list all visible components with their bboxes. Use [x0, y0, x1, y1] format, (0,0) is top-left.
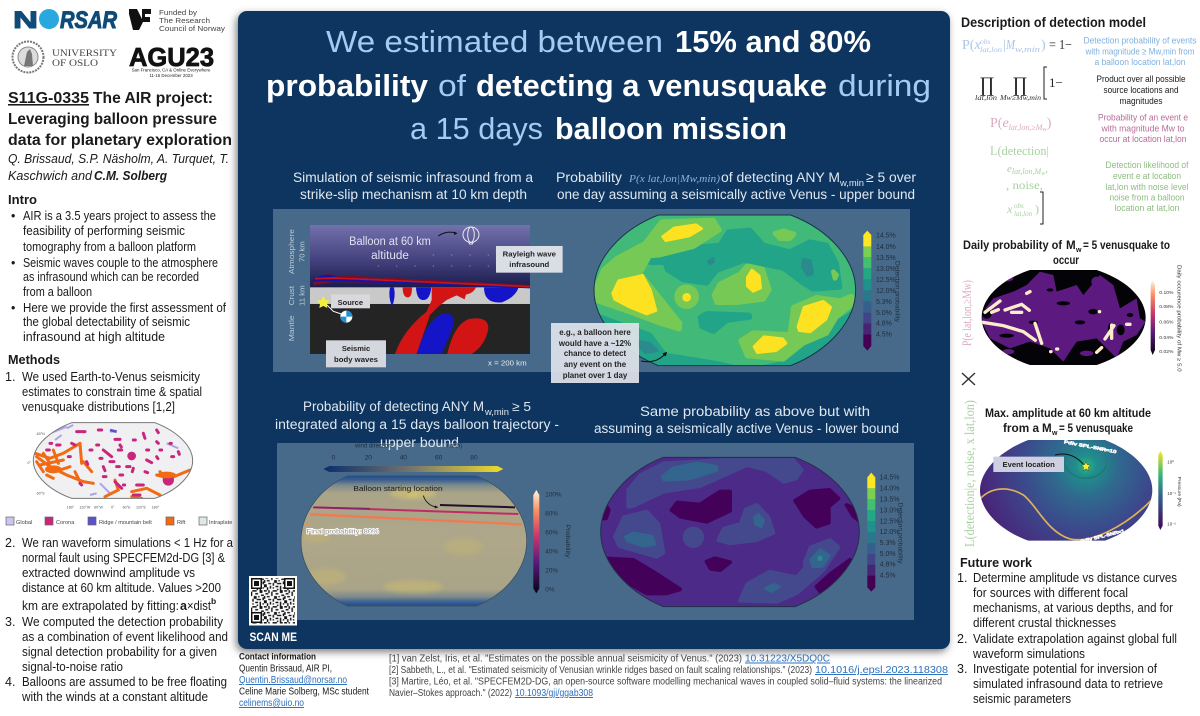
caption: daily detection probability: P(x lat,lon|Mw,min)	[628, 173, 720, 185]
map: balloon trajectory: Final probability: 80%	[307, 529, 379, 536]
caption: daily detection probability	[556, 170, 916, 203]
logo: University of Oslo: UNIVERSITY	[52, 49, 117, 59]
callout: balloon example: any event on the	[564, 360, 627, 369]
text block: Intro bullets: Here we provide the first assessment of	[23, 301, 226, 315]
chart: seismic infrasound simulation: Atmosphere	[287, 229, 296, 274]
heading: Intro: Intro	[8, 192, 37, 207]
annotation: event probability: occur at location lat,lon	[1100, 134, 1186, 145]
text block: future work list: waveform simulations	[972, 647, 1085, 661]
chart: seismic infrasound simulation: 70 km	[298, 241, 307, 262]
chart: seismic infrasound simulation: Balloon at 60 km	[349, 234, 431, 248]
caption: trajectory probability	[275, 399, 559, 433]
formula label: likelihood, rotated: L(detection|e, noise, x lat,lon)	[963, 400, 978, 547]
arrow: to balloon location	[641, 353, 666, 362]
colorbar: detection probability: 4.8%	[876, 321, 892, 328]
colorbar: occurrence probability: 0.10%	[1159, 290, 1174, 296]
text block: Methods item 1: We used Earth-to-Venus seismicity	[22, 370, 201, 384]
annotation: detection likelihood: noise from a balloon	[1110, 192, 1184, 204]
map: balloon trajectory: 0	[331, 455, 335, 462]
authors: Q. Brissaud, S.P. Näsholm, A. Turquet, T.	[8, 152, 229, 166]
logo: University of Oslo	[12, 42, 117, 72]
text block: Intro bullets: Seismic waves couple to the atmosphere	[23, 256, 218, 270]
callout: balloon example: e.g., a balloon here	[559, 328, 631, 337]
text block: Methods item 1: venusquake distributions [1,2]	[22, 400, 175, 414]
text block: Intro bullets: •	[11, 256, 15, 270]
colorbar: occurrence probability: 0.02%	[1159, 349, 1174, 355]
text block: future work list	[957, 571, 1177, 706]
formula: detection likelihood: w	[1041, 171, 1045, 177]
headline: a 15 days	[410, 111, 543, 146]
panel: main findings	[238, 11, 950, 649]
legend: distribution types: Intraplate	[209, 520, 232, 526]
authors: C.M. Solberg	[94, 169, 167, 183]
formula: detection likelihood: e	[1007, 163, 1012, 175]
text block: Intro bullets: AIR is a 3.5 years project to assess the	[23, 209, 216, 223]
colorbar: probability: 100%	[545, 491, 562, 498]
heading: Methods: Methods	[8, 352, 60, 367]
text block: Intro bullets: from a balloon	[23, 285, 92, 299]
colorbar: detection probability lower bound: 5.3%	[880, 540, 896, 547]
panel: top figures	[273, 209, 910, 372]
annotation: product: magnitudes	[1120, 96, 1163, 107]
colorbar: detection probability: 12.0%	[876, 288, 896, 295]
colorbar: detection probability: 5.0%	[876, 310, 892, 317]
heading: daily probability: M	[1066, 239, 1076, 252]
logo: AGU23: San Francisco, CA & Online Everywhere	[132, 68, 211, 72]
map: balloon trajectory: Balloon starting location	[353, 484, 443, 493]
colorbar: detection probability lower bound: 4.5%	[880, 573, 896, 580]
text block: Intro bullets: •	[11, 301, 15, 315]
annotation: detection probability	[1084, 36, 1197, 68]
map: balloon trajectory: north)	[447, 444, 462, 450]
references: [3] Martire, Léo, et al. "SPECFEM2D-DG, an open-source software modelling mechanical waves in coupled solid–fluid systems: the linearized	[389, 676, 942, 688]
text block: Methods items 2-4: with the winds at a constant altitude	[21, 690, 208, 704]
colorbar: probability: 0%	[545, 586, 555, 593]
colorbar: pressure: Pressure (Pa)	[1177, 477, 1182, 507]
text block: future work list: 1.	[957, 571, 967, 585]
caption: trajectory probability: Probability of detecting ANY M	[303, 399, 484, 415]
colorbar: detection probability: Detection probability	[893, 261, 900, 323]
formula: detection likelihood: ,	[1045, 163, 1048, 175]
formula: detection likelihood	[990, 143, 1049, 224]
logo: NORSAR: RSAR	[60, 7, 118, 34]
colorbar: detection probability: 14.0%	[876, 244, 896, 251]
poster title: Leveraging balloon pressure	[8, 111, 217, 128]
legend: distribution types	[6, 517, 232, 526]
formula: detection probability: P(x	[962, 38, 981, 53]
logo: AGU23: AGU23	[129, 42, 214, 72]
colorbar: detection probability lower bound: 12.5%	[880, 519, 899, 526]
formula: detection probability: |	[1003, 38, 1006, 53]
map: venusquake distribution: 120°E	[136, 506, 147, 510]
heading: future work: Future work	[960, 555, 1033, 570]
map: venusquake distribution: 60°E	[123, 506, 131, 510]
colorbar: detection probability lower bound: 13.5%	[880, 497, 899, 504]
formula: product over sources: Mw≥Mw,min	[999, 94, 1042, 102]
contact information: Quentin Brissaud, AIR PI,	[239, 664, 332, 674]
references: [2] Sabbeth, L., et al. "Estimated seismicity of Venusian wrinkle ridges based on fault scaling relationships." (2023)	[389, 665, 812, 676]
heading: max amplitude: from a	[1003, 422, 1040, 435]
chart: seismic infrasound simulation: body waves	[334, 355, 378, 364]
heading: daily probability: occur	[1053, 254, 1079, 267]
panel: bottom figures	[277, 443, 914, 620]
caption: simulation	[293, 170, 533, 203]
colorbar: probability: 80%	[545, 510, 558, 517]
chart: seismic infrasound simulation: x = 200 km	[488, 358, 527, 367]
caption: trajectory probability: w,min	[484, 407, 509, 417]
text block: Methods item 1: 1.	[5, 370, 15, 384]
formula: event probability: w	[1042, 127, 1047, 133]
annotation: detection likelihood: lat,lon with noise level	[1106, 182, 1188, 193]
references	[389, 654, 949, 699]
references: 10.1093/gji/ggab308	[515, 688, 593, 699]
text block: Methods items 2-4: normal fault using SPECFEM2d-DG [3] &	[22, 551, 226, 565]
formula: detection likelihood: , noise,	[1006, 178, 1043, 192]
logo: NORSAR	[13, 7, 118, 34]
callout: balloon example	[551, 323, 639, 383]
map: balloon trajectory: wind direction	[354, 444, 392, 450]
colorbar: pressure	[1158, 451, 1182, 530]
formula: detection likelihood: )	[1035, 202, 1039, 216]
text block: Methods items 2-4: signal detection probability for a given	[22, 645, 217, 659]
colorbar: detection probability: 4.5%	[876, 332, 892, 339]
poster title	[8, 90, 232, 149]
annotation: product: Product over all possible	[1096, 74, 1186, 85]
text block: future work list: seismic parameters	[973, 692, 1071, 706]
colorbar: detection probability: 12.5%	[876, 277, 896, 284]
text block: Intro bullets: tomography from a balloon platform	[23, 240, 196, 254]
map: balloon trajectory: 60	[435, 455, 443, 462]
text block: future work list: for sources with different focal	[973, 586, 1128, 600]
colorbar: occurrence probability: 0.08%	[1159, 304, 1174, 310]
text block: Methods items 2-4: We computed the detection probability	[22, 615, 224, 629]
heading: max amplitude: = 5 venusquake	[1059, 422, 1133, 435]
headline: We estimated between	[326, 24, 663, 59]
map: balloon trajectory	[301, 444, 571, 606]
logo: Research Council of Norway	[129, 8, 225, 33]
text block: Methods items 2-4: ×dist	[187, 599, 211, 613]
formula: product over sources: 1−	[1049, 75, 1063, 90]
text block: Methods items 2-4	[5, 536, 233, 704]
caption: trajectory probability: integrated along a 15 days balloon trajectory -	[275, 417, 559, 433]
contact information: celinems@uio.no	[239, 698, 304, 709]
map: venusquake distribution: 60°W	[94, 506, 104, 510]
colorbar: occurrence probability: Daily occurence probability of Mw ≥ 5.0	[1175, 265, 1181, 372]
annotation: product	[1096, 74, 1186, 107]
caption: daily detection probability: ≥ 5 over	[866, 170, 916, 186]
references: [1] van Zelst, Iris, et al. "Estimates on the possible annual seismicity of Venus." (2023)	[389, 654, 742, 664]
caption: lower bound: Same probability as above but with	[640, 404, 870, 420]
map: venusquake distribution: 60°S	[37, 491, 45, 495]
headline: detecting a venusquake	[476, 68, 827, 103]
chart: seismic infrasound simulation: altitude	[371, 248, 409, 262]
colorbar: detection probability lower bound	[867, 473, 904, 592]
formula: detection likelihood: lat,lon,M	[1012, 167, 1043, 176]
map: venusquake distribution: 0°	[27, 461, 31, 465]
logo: University of Oslo: OF OSLO	[52, 59, 98, 69]
heading: daily probability	[963, 239, 1170, 267]
text block: future work list: simulated infrasound data to retrieve	[973, 677, 1163, 691]
map: balloon trajectory: 80	[470, 455, 478, 462]
map: venusquake distribution: 180°	[67, 506, 75, 510]
headline: balloon mission	[555, 111, 787, 146]
colorbar: detection probability: 14.5%	[876, 233, 896, 240]
formula: detection probability: M	[1005, 38, 1016, 53]
QR code	[249, 576, 297, 626]
colorbar: probability: 20%	[545, 567, 558, 574]
formula: detection likelihood: obs	[1014, 202, 1024, 210]
formula: product over sources: lat,lon	[975, 94, 998, 102]
legend: distribution types: Rift	[177, 520, 186, 526]
text block: Methods items 2-4: b	[211, 596, 216, 606]
text block: Methods items 2-4: km are extrapolated by fitting:	[22, 599, 179, 613]
headline	[266, 24, 931, 146]
annotation: detection likelihood: event e at location	[1113, 171, 1181, 182]
text block: Methods items 2-4: We ran waveform simulations < 1 Hz for a	[22, 536, 233, 550]
chart: seismic infrasound simulation: Rayleigh wave	[503, 249, 556, 258]
map: venusquake distribution: 120°W	[79, 506, 91, 510]
text block: future work list: 3.	[957, 662, 967, 676]
text block: Methods items 2-4: distance at 60 km altitude. Values >200	[22, 581, 221, 595]
chart: seismic infrasound simulation: Mantle	[287, 315, 296, 341]
logo: Research Council of Norway: The Research	[159, 16, 210, 25]
colorbar: probability: Probability	[564, 524, 571, 559]
colorbar: detection probability lower bound: 14.5%	[880, 475, 899, 482]
formula: event probability: )	[1047, 116, 1052, 131]
authors	[8, 152, 229, 183]
chart: seismic infrasound simulation: infrasound	[509, 260, 550, 269]
text block: Methods item 1: estimates to constrain time & spatial	[22, 385, 202, 399]
map: maximum amplitude: Event location	[1002, 460, 1055, 469]
caption: simulation: strike-slip mechanism at 10 km depth	[300, 187, 527, 203]
caption: trajectory probability: ≥ 5	[512, 399, 531, 414]
contact information: Quentin.Brissaud@norsar.no	[239, 675, 347, 686]
annotation: product: source locations and	[1104, 85, 1178, 96]
heading: max amplitude: w	[1051, 430, 1058, 437]
map: balloon trajectory: 40	[400, 455, 407, 462]
formula: detection probability: lat,lon	[980, 45, 1002, 54]
colorbar: probability: 60%	[545, 529, 558, 536]
colorbar: occurrence probability: 0.06%	[1159, 319, 1174, 325]
formula label: event probability, rotated: P(e lat,lon,≥Mw)	[959, 280, 974, 346]
formula: event probability: P(e	[990, 116, 1009, 131]
colorbar: detection probability: 5.3%	[876, 299, 892, 306]
map: daily occurrence probability	[982, 265, 1181, 372]
text block: Intro bullets	[11, 209, 226, 344]
text block: Methods items 2-4: signal-to-noise ratio	[22, 660, 123, 674]
colorbar: pressure: 10⁻²	[1167, 522, 1176, 527]
callout: balloon example: would have a ~12%	[558, 339, 631, 348]
chart: seismic infrasound simulation: Seismic	[342, 344, 371, 353]
map: venusquake distribution: 0°	[111, 506, 115, 510]
formula: event probability: lat,lon,≥M	[1009, 123, 1044, 132]
colorbar: detection probability: 13.5%	[876, 255, 896, 262]
legend: distribution types: Ridge / mountain belt	[99, 520, 152, 526]
text block: future work list: mechanisms, at various depths, and for	[973, 601, 1173, 615]
caption: daily detection probability: of detecting ANY M	[721, 170, 840, 186]
colorbar: occurrence probability	[1151, 265, 1181, 372]
label: scan me: SCAN ME	[250, 630, 297, 644]
contact information: Contact information	[239, 650, 316, 662]
logo: NORSAR: N	[13, 7, 38, 34]
references: 10.1016/j.epsl.2023.118308	[815, 665, 949, 676]
headline: probability	[266, 68, 429, 103]
text block: Methods items 2-4: extracted downwind amplitude vs	[22, 566, 195, 580]
annotation: event probability	[1098, 112, 1188, 145]
map: venusquake distribution	[27, 423, 193, 510]
colorbar: probability	[533, 490, 571, 593]
heading: max amplitude	[985, 407, 1152, 437]
text block: Intro bullets: •	[11, 209, 15, 223]
formula: detection probability: w,min	[1015, 45, 1040, 54]
text block: future work list: Validate extrapolation against global full	[973, 632, 1177, 646]
map: maximum amplitude: Pdiv SPL-SNR=1	[1080, 528, 1125, 544]
formula: detection probability: )	[1041, 38, 1046, 53]
colorbar: detection probability lower bound: Detection probability	[897, 503, 904, 564]
text block: Methods items 2-4: a	[180, 599, 188, 613]
text block: future work list: 2.	[957, 632, 967, 646]
formula: detection likelihood: lat,lon	[1014, 210, 1033, 218]
colorbar: occurrence probability: 0.04%	[1159, 335, 1174, 341]
colorbar: pressure: 10⁰	[1167, 460, 1174, 465]
text block: Methods items 2-4: as a combination of event likelihood and	[22, 630, 228, 644]
text block: future work list: Determine amplitude vs distance curves	[973, 571, 1177, 585]
annotation: detection likelihood	[1106, 160, 1189, 214]
colorbar: detection probability: 13.0%	[876, 266, 896, 273]
map: maximum amplitude	[980, 439, 1182, 544]
poster title: S11G-0335	[8, 90, 89, 107]
annotation: detection likelihood: location at lat,lon	[1114, 203, 1180, 214]
text block: Intro bullets: feasibility of performing seismic	[23, 224, 185, 238]
contact information: Celine Marie Solberg, MSc student	[239, 686, 369, 698]
text block: Methods items 2-4: Balloons are assumed to be free floating	[22, 675, 227, 689]
headline: of	[438, 68, 466, 103]
headline: during	[838, 68, 931, 103]
colorbar: pressure: 10⁻¹	[1167, 491, 1176, 496]
text block: Intro bullets: the global detectability of seismic	[23, 315, 190, 329]
heading: description of detection model: Description of detection model	[961, 15, 1146, 30]
headline: 15% and 80%	[675, 24, 871, 59]
map: daily detection probability, upper bound	[594, 215, 900, 370]
chart: seismic infrasound simulation: Source	[338, 298, 363, 307]
formula: product over sources: ∏	[1013, 73, 1027, 97]
heading: max amplitude: M	[1042, 422, 1052, 435]
references: Navier–Stokes approach." (2022)	[389, 688, 512, 699]
heading: daily probability: w	[1075, 247, 1082, 254]
caption: daily detection probability: Probability	[556, 170, 623, 186]
text block: Methods items 2-4: 4.	[5, 675, 15, 689]
chart: seismic infrasound simulation: 11 km	[298, 285, 307, 306]
annotation: detection likelihood: Detection likelihood of	[1106, 160, 1189, 171]
map: detection probability, lower bound	[601, 457, 904, 607]
formula: detection probability: obs	[980, 37, 990, 46]
colorbar: detection probability lower bound: 5.0%	[880, 551, 896, 558]
caption: lower bound: assuming a seismically active Venus - lower bound	[594, 421, 899, 437]
formula: product over sources	[975, 67, 1063, 102]
icon: multiply	[962, 373, 975, 385]
colorbar: detection probability lower bound: 4.8%	[880, 562, 896, 569]
callout: balloon example: chance to detect	[564, 349, 626, 358]
annotation: detection probability: a balloon location lat,lon	[1094, 57, 1186, 68]
formula: detection likelihood: x	[1006, 202, 1013, 216]
caption: lower bound	[594, 404, 899, 437]
caption line: upper bound: upper bound	[380, 435, 459, 451]
formula: detection likelihood: L(detection|	[990, 143, 1049, 158]
references: 10.31223/X5DQ0C	[745, 654, 830, 664]
colorbar: probability: 40%	[545, 548, 558, 555]
logo: Research Council of Norway: Funded by	[159, 8, 197, 17]
formula: detection probability	[962, 37, 1072, 54]
heading: daily probability: = 5 venusquake to	[1083, 239, 1170, 252]
colorbar: detection probability lower bound: 14.0%	[880, 486, 899, 493]
map: balloon trajectory: 20	[365, 455, 372, 462]
text block: future work list: different crustal thicknesses	[973, 616, 1116, 630]
heading: daily probability: Daily probability of	[963, 239, 1062, 252]
map: maximum amplitude: Pdiv SPL-SNR=10	[1064, 439, 1117, 454]
text block: Methods items 2-4: 2.	[5, 536, 15, 550]
legend: distribution types: Global	[16, 520, 32, 526]
poster title: data for planetary exploration	[8, 132, 232, 149]
logo: Research Council of Norway: Council of Norway	[159, 24, 225, 33]
formula: product over sources: ∏	[980, 73, 994, 97]
text block: Intro bullets: infrasound at high altitude	[23, 330, 165, 344]
formula: detection probability: = 1−	[1049, 38, 1072, 53]
map: venusquake distribution: 180°	[152, 506, 160, 510]
text block: Intro bullets: as infrasound which can be recorded	[23, 270, 199, 284]
text block: future work list: Investigate potential for inversion of	[973, 662, 1157, 676]
heading: max amplitude: Max. amplitude at 60 km altitude	[985, 407, 1152, 420]
callout: balloon example: planet over 1 day	[563, 371, 628, 380]
poster title: The AIR project:	[93, 90, 213, 107]
text block: Methods item 1	[5, 370, 202, 414]
chart: seismic infrasound simulation	[287, 225, 563, 367]
authors: Kaschwich and	[8, 169, 93, 183]
logo: AGU23: 11-15 December 2023	[149, 73, 193, 78]
text block: Methods items 2-4: 3.	[5, 615, 15, 629]
map: venusquake distribution: 60°N	[37, 432, 45, 436]
colorbar: detection probability	[863, 231, 900, 351]
legend: distribution types: Corona	[56, 520, 75, 526]
contact information	[239, 650, 369, 709]
annotation: event probability: with magnitude Mw to	[1101, 124, 1184, 134]
annotation: event probability: Probability of an event e	[1098, 112, 1188, 124]
caption: daily detection probability: one day assuming a seismically active Venus - upper bound	[557, 187, 915, 203]
colorbar: detection probability lower bound: 12.0%	[880, 529, 899, 536]
caption: daily detection probability: w,min	[839, 178, 864, 188]
colorbar: detection probability lower bound: 13.0%	[880, 508, 899, 515]
caption: simulation: Simulation of seismic infrasound from a	[293, 170, 533, 186]
chart: seismic infrasound simulation: Crust	[287, 285, 296, 305]
